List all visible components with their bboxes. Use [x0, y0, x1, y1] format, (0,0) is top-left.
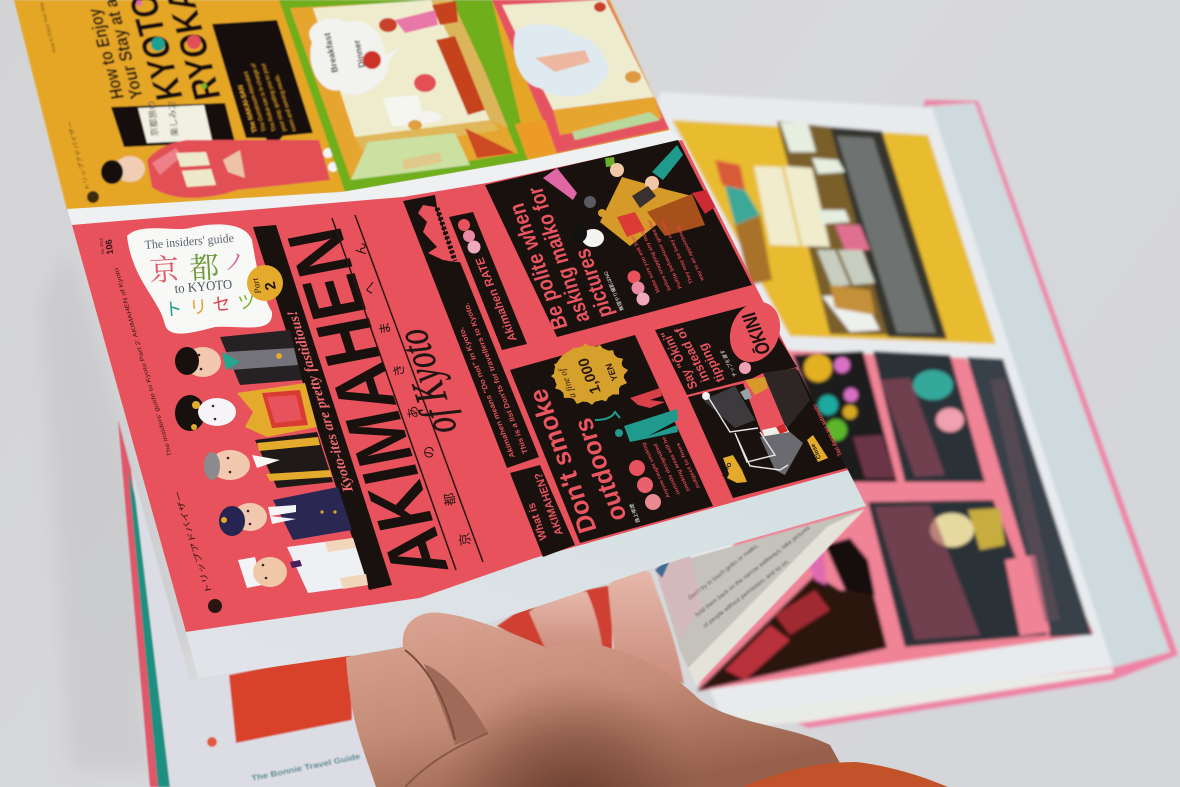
orange block on page below	[229, 650, 352, 743]
part 2 gold badge: 2	[263, 280, 280, 291]
caption on page below: The Bonnie Travel Guide	[251, 752, 362, 783]
panel: temple silhouette and definition	[403, 195, 539, 468]
rules and kana subtitle: ま	[377, 321, 393, 336]
smoke body text: Anyone caught smoking	[641, 442, 672, 498]
rules and kana subtitle: へ	[362, 280, 378, 296]
speech bubble: The Nakai-san: room and serving meals.	[274, 73, 298, 132]
person: conductor in navy uniform	[219, 487, 352, 540]
panel: Akimahen rate: Akimahen RATE	[472, 256, 520, 343]
page number and issue: 106	[104, 239, 115, 255]
white bottom margin	[186, 470, 866, 678]
close arrow: Close	[810, 442, 823, 460]
panel: Say Okini instead of tipping: instead of	[671, 325, 713, 384]
black sign with white inset	[111, 100, 235, 147]
pink cover	[780, 100, 1178, 728]
black sign with white inset: 京都旅の	[145, 100, 160, 137]
white cloud badge: insiders' guide: The insiders' guide	[144, 231, 235, 252]
panel: Say Okini instead of tipping: tipping	[695, 341, 728, 384]
red walker	[630, 388, 665, 408]
right page of the open book	[600, 92, 1178, 728]
fine starburst: 1,000	[575, 356, 605, 396]
person: older man in striped kimono	[204, 432, 333, 488]
pink room panel	[492, 0, 669, 153]
owl logo	[87, 191, 99, 203]
panel: Say Okini instead of tipping: Say "Ōkini"	[657, 329, 701, 391]
panel: Say Okini instead of tipping	[655, 294, 797, 395]
rules and kana subtitle: 都	[442, 491, 458, 507]
panel: taxi doors open and close	[688, 368, 847, 498]
panel: Say Okini instead of tipping: ŌKINI	[738, 310, 776, 357]
top yellow page: How to enjoy your stay at a Kyoto ryokan	[14, 0, 670, 210]
fine starburst: YEN	[604, 362, 620, 382]
rules and kana subtitle: ん	[353, 241, 369, 257]
hand holding the page: thumb and palm	[346, 613, 845, 787]
open arrow	[720, 455, 747, 483]
rules and kana subtitle: き	[391, 363, 407, 378]
white strip between top and red pages	[67, 130, 682, 225]
of Kyoto subtitle: of Kyoto	[386, 325, 467, 439]
part 2 gold badge	[247, 265, 283, 301]
green room panel	[279, 0, 528, 192]
speech bubble: The Nakai-san: your stay, guiding you to your	[261, 63, 288, 132]
panel: What is Akimahen	[510, 465, 575, 557]
panel: Don't smoke outdoors: outside designated	[653, 442, 682, 495]
hand fingers behind the sheet	[497, 571, 684, 684]
thought cloud	[514, 24, 608, 96]
red dot on page below	[207, 737, 217, 747]
fine starburst	[551, 343, 628, 405]
taxi grey body	[760, 432, 803, 475]
panel: Be polite when asking maiko: They may be busy on their	[660, 219, 695, 284]
black sign with white inset: 楽しみ方	[165, 100, 180, 137]
white page	[600, 92, 1113, 715]
rules and kana subtitle	[332, 215, 483, 570]
small header text: How to Enjoy Your Stay	[38, 1, 58, 53]
maiko illustration	[543, 145, 715, 247]
fold body text: Don't try to touch geiko or maiko,	[688, 543, 760, 602]
page number and issue	[98, 237, 115, 255]
panel: Be polite when asking maiko	[485, 140, 752, 337]
ryokan heading	[84, 0, 229, 103]
kimono woman	[101, 140, 338, 198]
panel: What is Akimahen: AKIMAHEN?	[533, 471, 566, 537]
speech bubble: The Nakai-san: The NAKAI-SAN	[237, 84, 259, 133]
part 2 gold badge: Part	[250, 277, 263, 296]
panel: Don't smoke outdoors: outdoors	[567, 415, 633, 525]
teal smoker	[595, 409, 678, 442]
shoji window	[383, 95, 425, 126]
fold underside of the sheet	[655, 509, 865, 686]
fold underside of the sheet: of people without permission, and so on.	[703, 559, 791, 630]
taxi roof sign	[745, 377, 768, 395]
main title AKIMAHEN: AKIMAHEN	[269, 221, 466, 584]
white cloud badge: insiders' guide	[127, 224, 272, 334]
rules and kana subtitle: の	[421, 445, 437, 460]
small japanese smoke note: 路上喫煙	[628, 503, 642, 524]
maid figure	[414, 74, 436, 92]
suitcase	[515, 120, 557, 158]
panel: Be polite when asking maiko: Polite behaviour goes far	[647, 219, 684, 289]
panel: Don't smoke outdoors: smoking areas will be	[661, 436, 692, 492]
table	[436, 36, 485, 115]
polite body text: Make sure you ask first	[630, 235, 662, 293]
panel: What is Akimahen: What is	[526, 501, 550, 542]
folded red page: Akimahen of Kyoto	[72, 140, 866, 678]
black title bar with tagline: Kyoto-ites are pretty fastidious!	[284, 309, 357, 494]
fold underside of the sheet: hold them back on the narrow walkways, take pictures	[695, 525, 812, 619]
panel: Don't smoke outdoors: subject to fines	[675, 442, 702, 489]
panel: Be polite when asking maiko: way to an appointment	[675, 224, 706, 282]
page number and issue: No. 2015	[98, 237, 105, 255]
panel: temple silhouette and definition: Akimahen means "Do not" in Kyoto.	[456, 326, 517, 459]
close arrow	[807, 435, 828, 462]
speech cloud: breakfast and dinner	[309, 19, 400, 95]
running side caption: The insiders' guide to Kyoto Part 2: AKIMAHEN of Kyoto	[114, 266, 174, 457]
figures	[913, 370, 953, 400]
person: chef in white	[238, 538, 368, 593]
pink-and-dark lower panel	[697, 350, 1094, 691]
panel: Be polite when asking maiko: before snapping any maiko	[638, 226, 673, 291]
speech bubble: The Nakai-san: The Nakai-san is in charge of	[251, 62, 278, 132]
rules and kana subtitle: あ	[405, 405, 421, 420]
white cloud badge: insiders' guide: リ	[189, 297, 208, 318]
panel: Be polite when asking maiko: Be polite when	[504, 201, 573, 332]
heading bars	[880, 378, 945, 477]
person: maiko in gold kimono	[175, 383, 317, 437]
page edge stack	[925, 103, 1170, 668]
white cloud badge: insiders' guide: to KYOTO	[174, 276, 233, 296]
white cloud badge: insiders' guide: ノ	[223, 250, 246, 275]
panel: temple silhouette and definition: This is a list Don'ts for travellers to Kyoto.	[461, 302, 530, 455]
speech bubble: The Nakai-san	[212, 20, 313, 152]
taxi door wireframe	[705, 392, 788, 470]
white cloud badge: insiders' guide: ト	[164, 299, 183, 320]
panel: Don't smoke outdoors: Don't smoke	[522, 385, 603, 537]
rules and kana subtitle: 京	[457, 531, 473, 547]
green room panel: Breakfast	[322, 32, 340, 74]
katakana publisher line: トリップアドバイザー	[173, 490, 214, 594]
red corner	[465, 128, 515, 158]
white cloud badge: insiders' guide: セ	[212, 294, 231, 315]
open arrow: Open	[720, 461, 732, 478]
panel: Be polite when asking maiko: asking maiko for	[522, 184, 595, 325]
yellow panel	[672, 120, 996, 344]
owl logo	[208, 599, 222, 613]
taxi doors small text: Taxi doors are automatic	[812, 402, 844, 457]
speech bubble: The Nakai-san: The Guestroom Attendant	[243, 70, 268, 132]
white cloud badge: insiders' guide: ツ	[237, 292, 256, 313]
polite rate faces	[628, 270, 640, 284]
fine starburst: a fine of	[556, 366, 579, 399]
small japanese note: 無理やり撮影はNG	[602, 270, 626, 312]
white cloud badge: insiders' guide: 京	[148, 253, 180, 288]
left: lower book edge and page	[118, 420, 400, 787]
smoke rate faces	[629, 460, 645, 476]
page below sheet	[720, 668, 1113, 725]
person: hotel manager in grey suit	[175, 330, 302, 385]
red page base	[72, 140, 848, 632]
small katakana logo text: トリップアドバイザー	[66, 120, 92, 191]
black title bar with tagline	[253, 225, 392, 590]
panel: Be polite when asking maiko: pictures	[569, 246, 618, 320]
green room panel: Dinner	[351, 38, 367, 69]
panel: Akimahen rate	[449, 212, 527, 350]
panel: Say Okini instead of tipping: チップを渡す	[719, 349, 739, 378]
sticky colored dots	[804, 354, 832, 382]
white cloud badge: insiders' guide: 都	[188, 251, 220, 286]
orange sleeve	[742, 762, 948, 787]
panel: Don't smoke outdoors	[510, 335, 713, 543]
